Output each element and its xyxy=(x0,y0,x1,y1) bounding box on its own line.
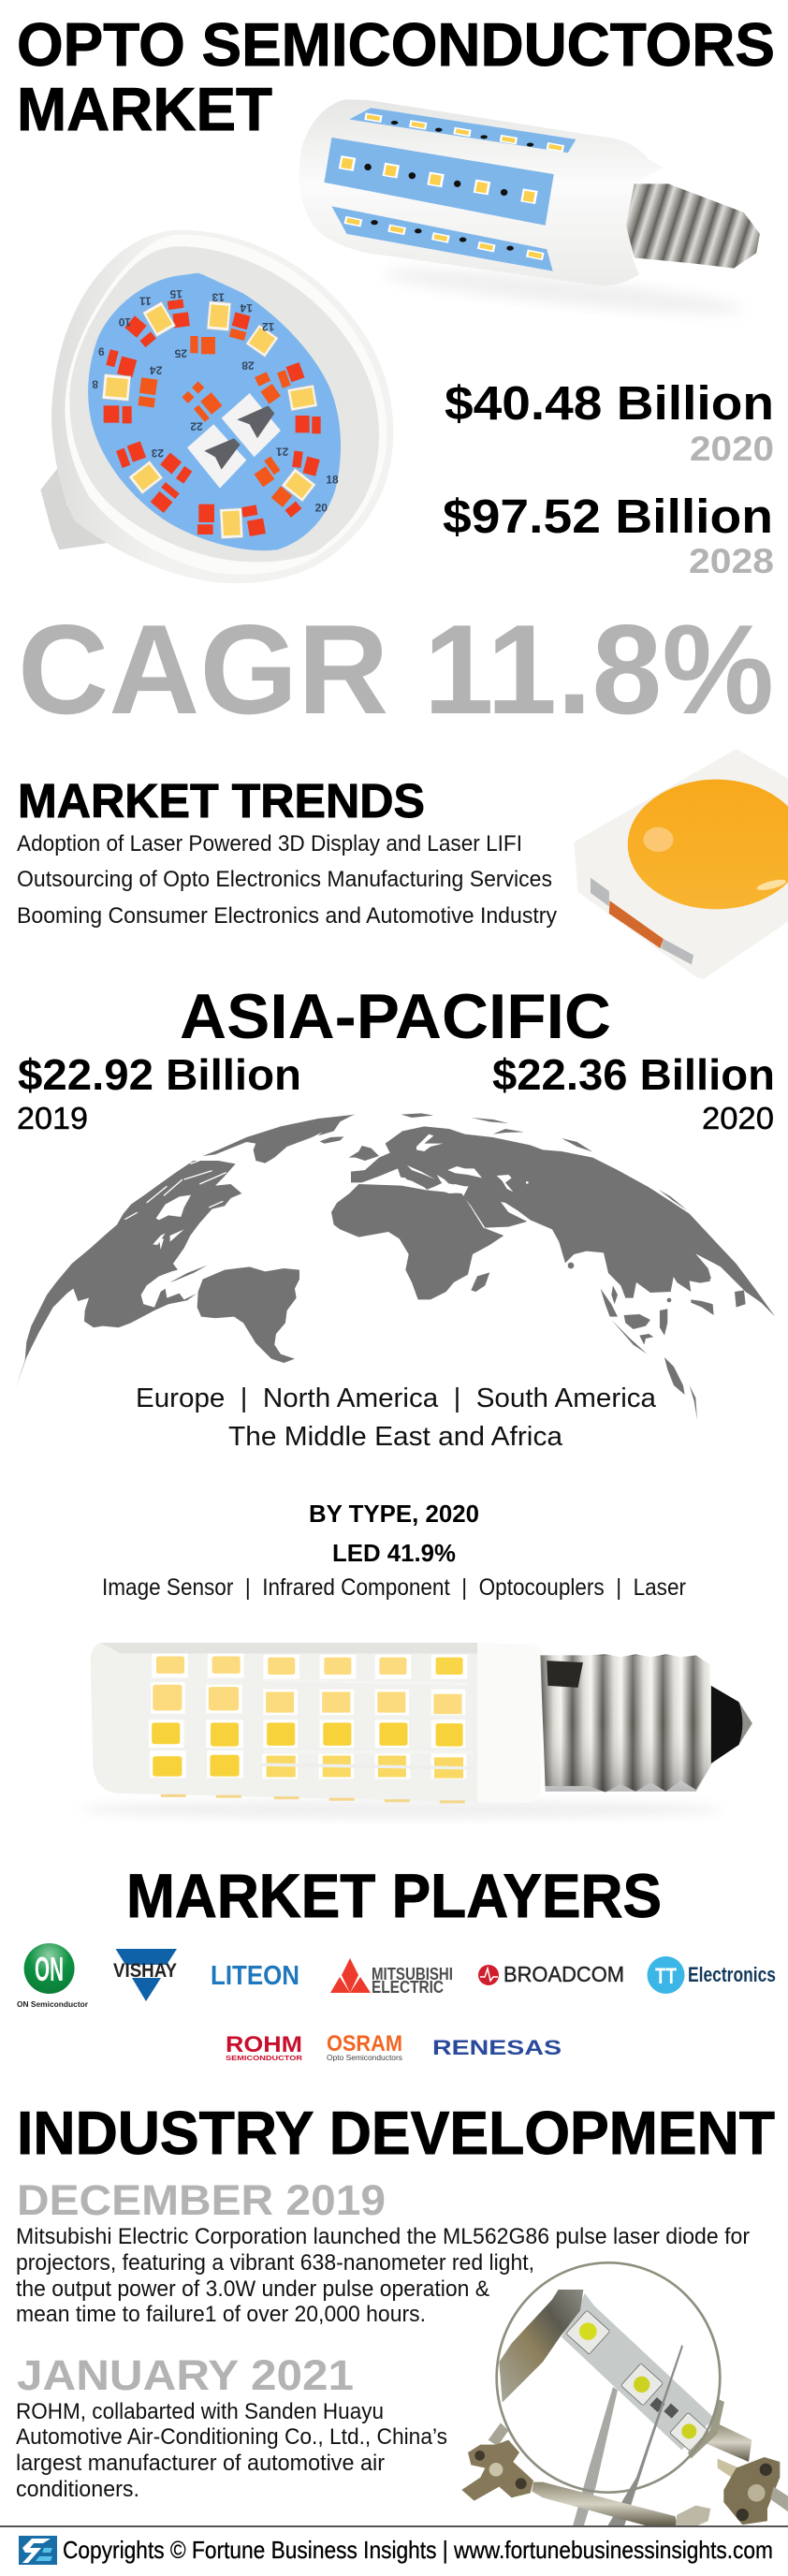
section: December 2019: the output power of 3.0W under pulse operation & xyxy=(16,2276,489,2302)
section: January 2021: conditioners. xyxy=(16,2477,139,2502)
image: round MR16 LED lamp: 8 xyxy=(92,378,98,391)
logo: Liteon: LITEON xyxy=(211,1961,299,1991)
footer xyxy=(0,2525,788,2565)
stat: Asia-Pacific 2019 xyxy=(17,1050,301,1135)
logo: Osram: OSRAM xyxy=(327,2031,402,2056)
stat: 2020 market size xyxy=(445,376,774,468)
stat: Asia-Pacific 2020 xyxy=(492,1050,775,1135)
logo: Vishay xyxy=(113,1949,177,2001)
logo: TT Electronics: TT xyxy=(655,1964,677,1989)
stat: 2020 market size: 2020 xyxy=(690,430,774,468)
section: December 2019 xyxy=(16,2176,750,2327)
title: MARKET xyxy=(17,75,272,143)
stat: 2020 market size: $40.48 Billion xyxy=(445,376,774,430)
image: round MR16 LED lamp: 11 xyxy=(139,294,152,307)
map: Americas and Greenland xyxy=(16,1115,356,1388)
section: market trends: Booming Consumer Electronics and Automotive Industry xyxy=(17,903,557,929)
stat: Asia-Pacific 2019: $22.92 Billion xyxy=(18,1050,301,1099)
logo: TT Electronics xyxy=(648,1956,776,1994)
image: magnifier over LED strip xyxy=(461,2262,788,2527)
section: by type: LED 41.9% xyxy=(332,1539,456,1567)
image: round MR16 LED lamp: 15 xyxy=(169,287,182,300)
section: January 2021: JANUARY 2021 xyxy=(17,2351,354,2399)
image: round MR16 LED lamp: 24 xyxy=(150,364,162,377)
stat: Asia-Pacific 2020: $22.36 Billion xyxy=(492,1050,775,1099)
heading: market players: MARKET PLAYERS xyxy=(126,1861,662,1930)
section: January 2021: largest manufacturer of automotive air xyxy=(16,2451,385,2476)
image: round MR16 LED lamp: 14 xyxy=(240,301,253,315)
image: round MR16 LED lamp xyxy=(40,230,393,583)
image: round MR16 LED lamp: 20 xyxy=(315,502,328,515)
image: round MR16 LED lamp: 28 xyxy=(241,359,255,373)
image: round MR16 LED lamp: 21 xyxy=(276,445,288,458)
image: round MR16 LED lamp: 25 xyxy=(174,346,187,359)
stat: 2028 market size: 2028 xyxy=(689,542,774,580)
image: round MR16 LED lamp: 18 xyxy=(326,474,339,487)
region list: The Middle East and Africa xyxy=(228,1422,563,1452)
image: round MR16 LED lamp: 23 xyxy=(151,446,164,460)
logo row: market players xyxy=(17,1943,776,2062)
logo: Renesas: RENESAS xyxy=(432,2036,562,2059)
section: market trends: Outsourcing of Opto Electronics Manufacturing Services xyxy=(17,867,552,892)
section: December 2019: DECEMBER 2019 xyxy=(17,2176,386,2224)
image: round MR16 LED lamp: 9 xyxy=(98,345,105,359)
logo: ON Semiconductor: ON Semiconductor xyxy=(17,2000,88,2009)
logo: Vishay: VISHAY xyxy=(113,1960,177,1982)
logo: ON Semiconductor xyxy=(17,1943,88,2009)
icon: Fortune Business Insights logo xyxy=(19,2536,57,2565)
title xyxy=(17,10,775,143)
world map xyxy=(16,1113,775,1420)
stat: 2028 market size xyxy=(443,490,774,580)
section: December 2019: Mitsubishi Electric Corporation launched the ML562G86 pulse laser diode for xyxy=(16,2224,750,2249)
section: market trends xyxy=(17,774,557,929)
CAGR headline: CAGR 11.8% xyxy=(18,598,774,740)
stat: Asia-Pacific 2019: 2019 xyxy=(17,1101,88,1135)
image: round MR16 LED lamp: 13 xyxy=(212,290,225,303)
logo: Mitsubishi Electric xyxy=(330,1958,453,1997)
section: January 2021 xyxy=(16,2351,447,2502)
section: December 2019: mean time to failure1 of over 20,000 hours. xyxy=(16,2302,426,2327)
image: LED capsule bulb xyxy=(80,1643,752,1819)
logo: Rohm: ROHM xyxy=(226,2032,302,2057)
logo: Mitsubishi Electric: MITSUBISHI xyxy=(372,1965,453,1983)
section: January 2021: Automotive Air-Conditioning Co., Ltd., China’s xyxy=(16,2424,447,2450)
title: OPTO SEMICONDUCTORS xyxy=(17,10,775,79)
logo: ON Semiconductor: ON xyxy=(35,1950,64,1988)
map: Europe, Africa and Asia xyxy=(318,1113,775,1420)
section: market trends: Adoption of Laser Powered 3D Display and Laser LIFI xyxy=(17,831,522,856)
image: round MR16 LED lamp: 22 xyxy=(190,420,203,433)
heading: Asia-Pacific: ASIA-PACIFIC xyxy=(180,981,611,1052)
section: by type xyxy=(102,1500,686,1601)
region list: Europe | North America | South America xyxy=(136,1383,657,1413)
image: SMD LED chip xyxy=(574,749,788,979)
logo: Rohm: SEMICONDUCTOR xyxy=(226,2056,302,2062)
section: January 2021: ROHM, collabarted with Sanden Huayu xyxy=(16,2399,384,2424)
logo: Broadcom: BROADCOM xyxy=(503,1962,624,1986)
image: round MR16 LED lamp: 10 xyxy=(118,315,131,329)
region list xyxy=(136,1383,657,1452)
section: market trends: MARKET TRENDS xyxy=(18,774,425,827)
section: by type: BY TYPE, 2020 xyxy=(309,1500,479,1528)
logo: Osram: Opto Semiconductors xyxy=(327,2054,402,2062)
image: corn LED bulb xyxy=(299,99,760,321)
section: by type: Image Sensor | Infrared Component | Optocouplers | Laser xyxy=(102,1574,686,1601)
section: December 2019: projectors, featuring a vibrant 638-nanometer red light, xyxy=(16,2250,534,2276)
image: round MR16 LED lamp: 12 xyxy=(262,320,274,333)
heading: industry development: INDUSTRY DEVELOPMENT xyxy=(17,2099,775,2167)
stat: 2028 market size: $97.52 Billion xyxy=(443,490,773,543)
logo: Mitsubishi Electric: ELECTRIC xyxy=(372,1978,444,1997)
stat: Asia-Pacific 2020: 2020 xyxy=(702,1101,774,1135)
